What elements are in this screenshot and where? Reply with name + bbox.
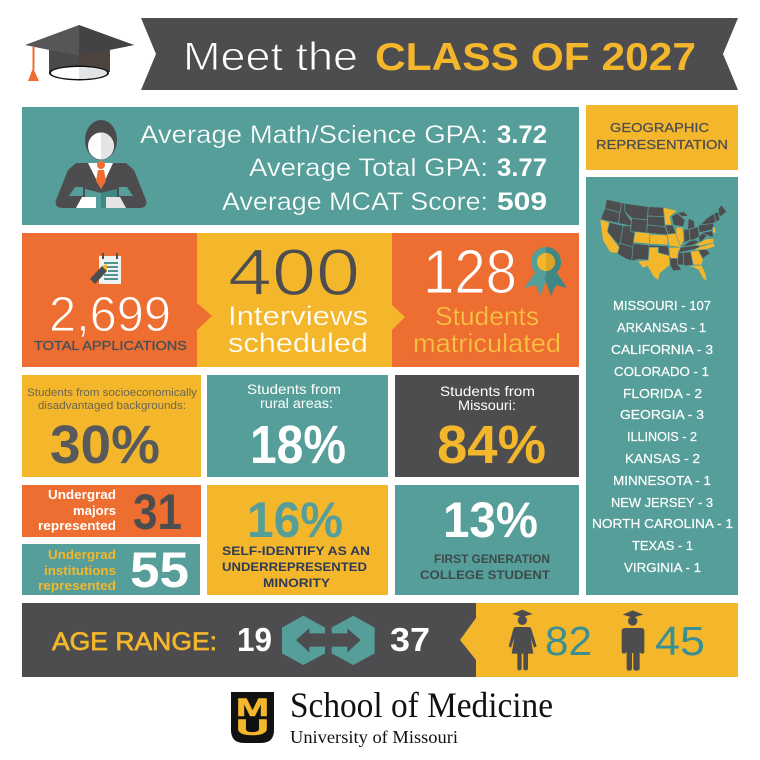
icon: student with book <box>56 120 146 208</box>
panel: first generation: COLLEGE STUDENT <box>420 568 551 582</box>
list: states and student counts: MINNESOTA - 1 <box>613 474 711 488</box>
icon: graduation cap <box>25 25 134 81</box>
list: states and student counts: TEXAS - 1 <box>632 539 693 553</box>
title: Meet the: Meet the <box>183 35 358 79</box>
list: states and student counts: ARKANSAS - 1 <box>617 321 706 335</box>
list: states and student counts: NEW JERSEY - 3 <box>611 496 713 510</box>
panel: undergrad majors: majors <box>73 503 116 518</box>
list: states and student counts: GEORGIA - 3 <box>620 408 704 422</box>
panel: interviews scheduled: 400 <box>228 235 360 309</box>
panel: from Missouri <box>395 375 579 477</box>
panel: gender counts: 45 <box>655 618 705 664</box>
panel: socioeconomically disadvantaged: 30% <box>50 415 160 475</box>
title: Class of 2027: CLASS OF 2027 <box>375 36 696 79</box>
panel: age range: AGE RANGE: <box>52 628 217 656</box>
panel: undergrad majors <box>22 484 201 540</box>
panel: students matriculated <box>392 233 579 367</box>
list: states and student counts: CALIFORNIA - 3 <box>611 343 713 357</box>
panel: gender counts: 82 <box>545 618 592 664</box>
panel: gender counts <box>460 603 738 677</box>
panel: rural areas <box>207 375 388 477</box>
list: states and student counts: ILLINOIS - 2 <box>627 430 697 444</box>
panel: geographic heading: GEOGRAPHIC <box>610 120 709 135</box>
panel: interviews scheduled: Interviews <box>228 301 368 331</box>
text: School of Medicine: School of Medicine <box>290 685 553 725</box>
map: United States <box>600 199 727 282</box>
panel: underrepresented minority: SELF-IDENTIFY AS AN <box>222 544 370 558</box>
panel: rural areas: 18% <box>250 415 346 475</box>
panel: undergrad majors: represented <box>38 518 116 533</box>
panel: undergrad institutions <box>22 542 200 598</box>
icon: hexagon arrows <box>282 616 375 665</box>
title banner <box>141 18 738 90</box>
panel: undergrad institutions: institutions <box>44 563 116 578</box>
panel: academic averages <box>22 107 579 225</box>
panel: underrepresented minority <box>207 485 388 595</box>
panel: underrepresented minority: MINORITY <box>263 576 330 590</box>
text: math science GPA: Average Math/Science GPA: <box>140 121 488 149</box>
list: states and student counts: KANSAS - 2 <box>625 452 700 466</box>
text: University of Missouri: University of Missouri <box>290 727 458 747</box>
text: MCAT score: 509 <box>497 188 547 216</box>
icon: male graduate <box>622 610 644 671</box>
panel: age range: 19 <box>237 621 272 658</box>
panel: from Missouri: Missouri: <box>458 397 516 413</box>
panel: students matriculated: 128 <box>423 238 517 307</box>
icon: award ribbon <box>524 247 567 296</box>
text: MCAT score: Average MCAT Score: <box>222 188 488 216</box>
panel: rural areas: Students from <box>247 381 341 397</box>
logo: University of Missouri shield <box>231 692 274 743</box>
list: states and student counts: NORTH CAROLINA - 1 <box>592 517 733 531</box>
panel: rural areas: rural areas: <box>260 395 333 411</box>
list: states and student counts: MISSOURI - 107 <box>613 299 711 313</box>
panel: undergrad institutions: 55 <box>130 542 189 598</box>
panel: geographic representation <box>586 177 738 595</box>
icon: clipboard and pencil <box>90 253 121 284</box>
panel: socioeconomically disadvantaged <box>22 375 201 477</box>
text: total GPA: 3.77 <box>497 154 547 182</box>
panel: from Missouri: Students from <box>440 383 535 399</box>
panel: undergrad majors: Undergrad <box>48 487 116 502</box>
list: states and student counts: VIRGINIA - 1 <box>624 561 701 575</box>
list: states and student counts <box>592 299 733 575</box>
panel: undergrad majors: 31 <box>133 484 182 540</box>
panel: geographic heading: REPRESENTATION <box>596 137 728 152</box>
list: states and student counts: COLORADO - 1 <box>614 365 709 379</box>
panel: interviews scheduled <box>197 233 392 367</box>
panel: first generation: FIRST GENERATION <box>434 552 550 566</box>
panel: first generation <box>395 485 579 595</box>
list: states and student counts: FLORIDA - 2 <box>623 387 702 401</box>
panel: total applications: TOTAL APPLICATIONS <box>34 338 187 353</box>
text: math science GPA: 3.72 <box>497 121 547 149</box>
logo: University of Missouri shield: M <box>236 694 269 722</box>
panel: total applications <box>22 233 212 367</box>
icon: female graduate <box>509 610 537 670</box>
text: total GPA: Average Total GPA: <box>249 154 488 182</box>
panel: from Missouri: 84% <box>437 415 546 475</box>
panel: students matriculated: Students <box>435 301 539 331</box>
panel: interviews scheduled: scheduled <box>228 328 368 358</box>
panel: socioeconomically disadvantaged: Students from socioeconomically <box>27 387 198 399</box>
panel: undergrad institutions: represented <box>38 578 116 593</box>
logo: University of Missouri shield: U <box>236 715 269 740</box>
panel: socioeconomically disadvantaged: disadvantaged backgrounds: <box>38 400 186 412</box>
panel: first generation: 13% <box>443 492 538 548</box>
panel: underrepresented minority: UNDERREPRESENTED <box>222 560 367 574</box>
panel: students matriculated: matriculated <box>413 328 561 358</box>
panel: geographic heading <box>586 105 738 170</box>
panel: underrepresented minority: 16% <box>247 492 343 548</box>
panel: undergrad institutions: Undergrad <box>48 547 116 562</box>
panel: age range: 37 <box>390 621 430 658</box>
panel: age range <box>22 603 476 677</box>
panel: total applications: 2,699 <box>49 288 171 342</box>
